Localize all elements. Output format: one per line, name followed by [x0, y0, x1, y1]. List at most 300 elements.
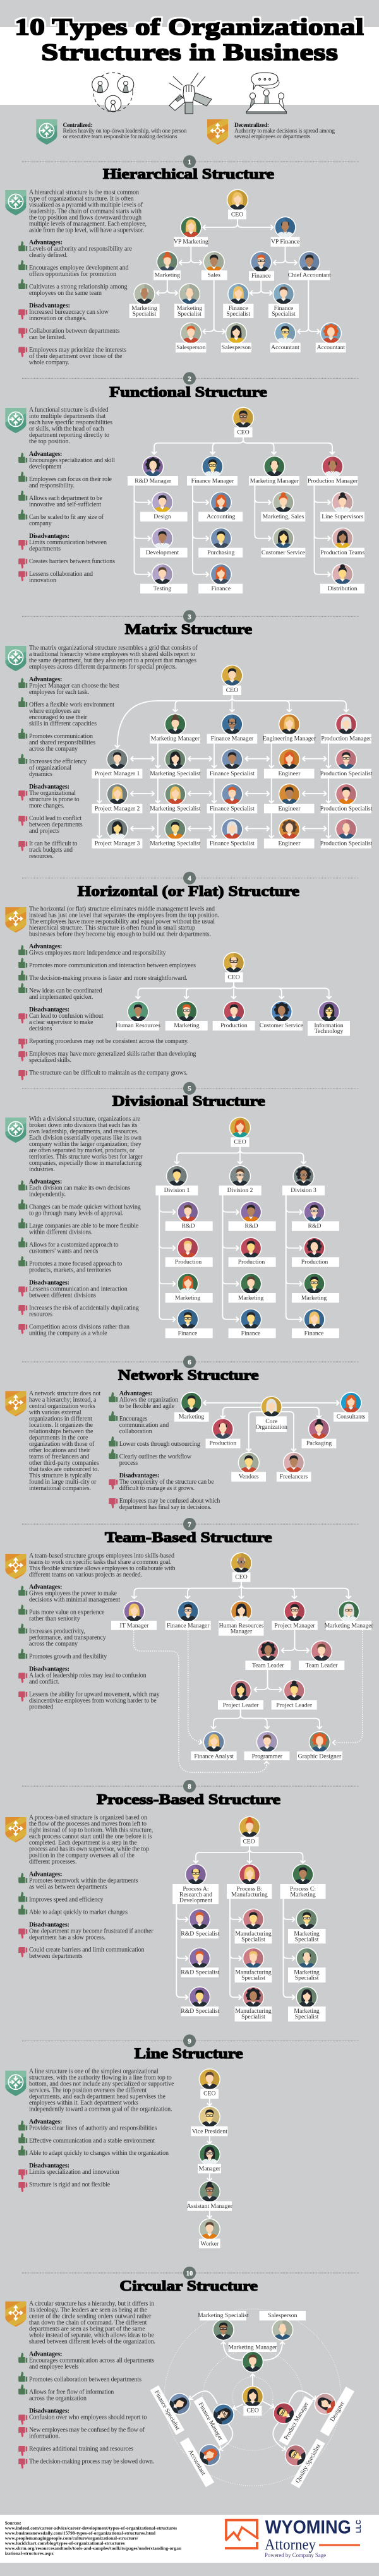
disadvantages: more changes.: [29, 802, 64, 809]
node: Marketing Manager: Marketing Manager: [325, 1623, 374, 1630]
advantages: performance, and transparency: [29, 1634, 106, 1642]
disadvantages: Collaboration between departments: [29, 328, 120, 335]
node: Accountant: [316, 322, 346, 352]
node: Customer Service: [261, 528, 305, 558]
node: Testing: [140, 563, 188, 593]
node: Finance Specialist: Specialist: [226, 311, 250, 318]
disadvantages: between departments: [29, 1953, 83, 1960]
heading: circular: Circular Structure: [119, 2278, 258, 2294]
node: Manufacturing Specialist: Specialist: [241, 2013, 265, 2020]
node: Marketing Manager: [228, 2342, 277, 2373]
node: VP Marketing: [174, 217, 208, 247]
node: Finance Specialist: Finance Specialist: [210, 805, 255, 812]
description: each have specific responsibilities: [29, 419, 112, 426]
legend: decentralized: several employees or departments: [234, 134, 310, 140]
disadvantages: A lack of leadership roles may lead to confusion: [29, 1672, 147, 1679]
node: Process C: Marketing: Marketing: [290, 1891, 316, 1898]
disadvantages: Lessens communication and interaction: [29, 1285, 128, 1293]
disadvantages: departments: [29, 546, 61, 552]
sources: www.indeed.com/career-advice/career-development/types-of-organizational-structures: [5, 2525, 177, 2531]
section 5: divisional structure: [5, 1082, 359, 1338]
description: visualized as a pyramid with multiple levels of: [29, 202, 143, 208]
node: Marketing Specialist: [288, 1986, 326, 2022]
disadvantages: [18, 533, 115, 584]
node: Finance Specialist: Specialist: [272, 311, 296, 318]
node: R&D Specialist: [181, 1909, 220, 1938]
node: Production Specialist: Production Specialist: [320, 840, 373, 847]
org chart: hierarchical: [129, 189, 346, 352]
node: Division 3: Division 3: [291, 1187, 316, 1194]
badge 6: 6: [188, 1359, 191, 1366]
description: departments in the core: [29, 1434, 88, 1441]
description: other third-party companies: [29, 1460, 99, 1467]
disadvantages: disincentivize employees from working harder to be: [29, 1697, 157, 1705]
node: Project Manager 3: Project Manager 3: [95, 840, 140, 847]
heading: horizontal: Horizontal (or Flat) Structure: [78, 883, 299, 899]
node: Finance: Finance: [211, 585, 231, 592]
description: broken down into divisions that each has its: [29, 1122, 137, 1129]
node: Marketing: Marketing: [301, 1294, 327, 1301]
node: Vendors: Vendors: [239, 1473, 259, 1480]
disadvantages: Structure is rigid and not flexible: [29, 2181, 111, 2188]
node: CEO: [229, 1117, 251, 1147]
logo: WYOMING: [265, 2517, 351, 2538]
advantages: Lower costs through outsourcing: [119, 1441, 200, 1448]
node: Marketing Specialist: Marketing: [131, 305, 157, 312]
advantages: across the organization: [29, 2395, 87, 2402]
node: Finance: [198, 563, 243, 593]
advantages: Encourages: [119, 1416, 148, 1422]
node: Finance Manager: Finance Manager: [167, 1623, 210, 1630]
logo: [225, 2517, 363, 2559]
node: Marketing: Marketing: [174, 1022, 200, 1029]
disadvantages: Employees may have more generalized skills rather than developing: [29, 1051, 196, 1058]
description: The horizontal (or flat) structure eliminates middle management levels and: [29, 905, 215, 913]
description: [29, 2301, 155, 2345]
description: [29, 2068, 174, 2113]
node: Production: Production: [220, 1022, 248, 1029]
node: Marketing Specialist: [288, 1909, 326, 1943]
node: Marketing Specialist: Specialist: [295, 1975, 319, 1982]
connector arrows: [209, 2099, 210, 2218]
description: different teams on various projects as needed.: [29, 1571, 142, 1578]
description: different processes.: [29, 1859, 76, 1865]
advantages: Gives employees more independence and responsibility: [29, 950, 166, 957]
node: Marketing Specialist: [198, 2311, 249, 2340]
section 1: hierarchical structure: [5, 155, 359, 366]
description: departments, and each department head supervises the: [29, 2094, 165, 2100]
node: Finance Analyst: Finance Analyst: [194, 1753, 234, 1760]
node: Process A: Research and Development: Research and: [179, 1891, 212, 1898]
node: CEO: [239, 1816, 260, 1846]
node: Production: [206, 1418, 240, 1448]
node: Programmer: [244, 1731, 289, 1760]
disadvantages: Lessens collaboration and: [29, 571, 93, 578]
sources: www.shrm.org/resourcesandtools/tools-and-samples/toolkits/pages/understanding-organ: [5, 2546, 181, 2551]
advantages: of organizational: [29, 765, 71, 772]
description: multiple levels of management. Each employee,: [29, 221, 147, 227]
advantages: to be flexible and agile: [119, 1403, 175, 1410]
description: have a hierarchy; instead, a: [29, 1397, 97, 1404]
node: Production Manager: [307, 456, 358, 486]
advantages: company: [29, 520, 52, 527]
advantages: Promotes communication: [29, 733, 93, 740]
node: R&D: [229, 1201, 276, 1231]
disadvantages: Limits communication between: [29, 539, 107, 546]
advantages: Advantages:: [29, 2351, 62, 2358]
advantages: Allows for a customized approach to: [29, 1241, 119, 1249]
description: instead has just one level that separates the employees from the top position.: [29, 912, 219, 919]
disadvantages: Lessens the ability for upward movement, which may: [29, 1691, 160, 1698]
node: Process C: Marketing: [280, 1864, 326, 1899]
node: R&D: [165, 1201, 213, 1231]
node: Production Teams: Production Teams: [320, 549, 364, 556]
org chart: functional: [128, 407, 364, 593]
node: Human Resources Manager: Human Resources: [219, 1623, 264, 1630]
node: Marketing: Marketing: [155, 272, 180, 279]
node: Purchasing: Purchasing: [207, 549, 234, 556]
disadvantages: between departments: [29, 821, 83, 828]
node: IT Manager: IT Manager: [119, 1623, 149, 1630]
description: shared between different levels of the organization.: [29, 2339, 155, 2345]
node: CEO: CEO: [227, 974, 240, 981]
node: Finance Specialist: [207, 784, 257, 813]
section 9: line structure: [5, 2034, 359, 2248]
advantages: where employees are: [29, 708, 81, 715]
advantages: Encourages communication across all departments: [29, 2358, 154, 2364]
advantages: decisions with minimal management: [29, 1596, 121, 1604]
concentric rings: [164, 2309, 341, 2486]
icon: decentralized shield: [5, 1388, 26, 1420]
disadvantages: [18, 1922, 153, 1960]
node: R&D Specialist: R&D Specialist: [181, 1969, 220, 1976]
advantages: Large companies are able to be more flexible: [29, 1222, 139, 1230]
disadvantages: It can be difficult to: [29, 840, 77, 847]
node: Salesperson: Salesperson: [268, 2312, 298, 2319]
connector arrows: [159, 1147, 304, 1320]
advantages: as well as between departments: [29, 1884, 107, 1890]
icon: centralized shield: [5, 408, 26, 433]
node: Product Manager: Product Manager: [283, 2400, 310, 2441]
advantages: Changes can be made quicker without having: [29, 1203, 141, 1211]
node: Marketing, Sales: Marketing, Sales: [263, 513, 304, 520]
node: R&D Specialist: R&D Specialist: [181, 1931, 220, 1938]
section 8: process-based structure: [5, 1780, 359, 2022]
advantages: process: [119, 1460, 138, 1467]
node: Project Manager 2: Project Manager 2: [95, 805, 140, 812]
advantages: development: [29, 463, 61, 470]
description: independently toward a common goal of the organization.: [29, 2106, 172, 2113]
description: that tasks are outsourced to.: [29, 1466, 99, 1473]
logo: Attorney: [265, 2537, 316, 2553]
description: bottom, and does not include any specialized or supportive: [29, 2081, 174, 2087]
org chart: matrix: [92, 665, 373, 849]
node: Process C: Marketing: Process C:: [290, 1885, 316, 1892]
badge 8: [22, 1780, 359, 1792]
advantages: Gives employees the power to make: [29, 1590, 117, 1597]
sources: [5, 2520, 181, 2556]
disadvantages: Employees may prioritize the interests: [29, 347, 126, 354]
node: CEO: [227, 189, 248, 219]
node: Marketing: [165, 1001, 208, 1030]
disadvantages: uniting the company as a whole: [29, 1330, 107, 1337]
advantages: [18, 2119, 169, 2157]
description: [29, 1815, 153, 1865]
section 2: functional structure: [5, 372, 364, 593]
node: Engineer: Engineer: [279, 770, 301, 777]
description: position in the company oversees all of the: [29, 1852, 135, 1859]
advantages: and responsibility.: [29, 482, 75, 489]
disadvantages: Limits specialization and innovation: [29, 2169, 119, 2176]
node: Marketing Specialist: Marketing Specialist: [150, 805, 201, 812]
description: territories. This structure works best for larger: [29, 1154, 143, 1160]
description: The employees have more responsibility and equal power without the usual: [29, 918, 215, 926]
node: Finance: [229, 1308, 276, 1338]
heading: functional: Functional Structure: [109, 384, 267, 400]
description: center of the circle sending orders outward rather: [29, 2313, 152, 2320]
node: Marketing Specialist: Marketing: [294, 2008, 320, 2015]
node: Team Leader: Team Leader: [306, 1662, 338, 1669]
node: Marketing: [292, 1273, 339, 1303]
advantages: Allows each department to be: [29, 495, 103, 502]
description: the same department, but they also report to a project that manages: [29, 657, 196, 664]
node: Customer Service: [260, 1001, 303, 1030]
description: or skills, with the head of each: [29, 426, 104, 432]
description: A process-based structure is organized based on: [29, 1815, 147, 1821]
heading: line: Line Structure: [135, 2046, 243, 2061]
node: Engineer: [264, 749, 315, 778]
heading: hierarchical: Hierarchical Structure: [103, 166, 274, 182]
node: Marketing Specialist: Marketing Specialist: [198, 2312, 249, 2319]
advantages: [18, 1178, 141, 1274]
node: IT Manager: [111, 1601, 157, 1630]
node: Production: [213, 1001, 255, 1030]
node: Manager: [198, 2144, 221, 2173]
node: Process A: Research and Development: [172, 1864, 219, 1904]
badge 9: 9: [188, 2037, 191, 2045]
node: Project Manager 3: [92, 818, 142, 849]
node: CEO: CEO: [203, 2090, 215, 2097]
advantages: New ideas can be coordinated: [29, 987, 102, 994]
disadvantages: and conflict.: [29, 1678, 59, 1686]
disadvantages: difficult to manage as it grows.: [119, 1485, 195, 1492]
node: Division 3: [282, 1166, 325, 1195]
node: Production Manager: Production Manager: [308, 477, 358, 485]
node: Marketing Manager: Marketing Manager: [228, 2344, 277, 2351]
disadvantages: department has a slow process.: [29, 1935, 105, 1941]
node: Marketing: [174, 1392, 209, 1422]
connector arrows: [134, 438, 332, 575]
node: Designer: [310, 2387, 354, 2436]
description: right instead of top to bottom. With this structure,: [29, 1827, 153, 1834]
badge 7: [22, 1518, 359, 1530]
connector arrows: [190, 2342, 315, 2450]
node: Manufacturing Specialist: Specialist: [241, 1936, 265, 1943]
node: Project Manager 1: [92, 749, 142, 778]
node: Production: Production: [238, 1258, 265, 1265]
legend: centralized: or executive team responsible for making decisions: [63, 133, 177, 140]
heading: network: Network Structure: [118, 1367, 259, 1383]
advantages: Promotes more communication and interaction between employees: [29, 962, 196, 969]
disadvantages: The decision-making process may be slowed down.: [29, 2459, 154, 2465]
disadvantages: Reporting procedures may not be consistent across the company.: [29, 1038, 189, 1045]
description: organization with those of: [29, 1441, 95, 1448]
description: [29, 1390, 101, 1492]
node: Worker: [199, 2219, 220, 2248]
disadvantages: a clear supervisor to make: [29, 1019, 93, 1026]
node: Finance Specialist: [207, 818, 257, 849]
node: Information Technology: Technology: [315, 1028, 343, 1035]
disadvantages: Disadvantages:: [29, 1666, 69, 1673]
node: Engineer: [264, 818, 315, 849]
disadvantages: Confusion over who employees should report to: [29, 2414, 147, 2421]
advantages: [18, 943, 196, 1001]
advantages: Offers a flexible work environment: [29, 701, 114, 708]
node: Design: [140, 491, 188, 522]
node: Human Resources Manager: Manager: [231, 1628, 253, 1635]
disadvantages: Requires additional training and resources: [29, 2446, 133, 2452]
node: Production: [292, 1237, 339, 1267]
node: Production Manager: Production Manager: [321, 736, 371, 742]
advantages: across the company: [29, 746, 78, 753]
connector arrows: [99, 695, 346, 838]
description: with various external: [29, 1409, 81, 1416]
disadvantages: structure is prone to: [29, 796, 80, 803]
node: Finance Analyst: [191, 1731, 237, 1760]
advantages: [18, 676, 119, 778]
disadvantages: Disadvantages:: [29, 302, 70, 309]
badge 5: [22, 1082, 359, 1095]
node: Project Leader: Project Leader: [223, 1702, 259, 1708]
node: Sales: Sales: [207, 272, 220, 279]
description: industries.: [29, 1166, 55, 1173]
legend: centralized: [36, 119, 187, 145]
node: Team Leader: [245, 1640, 291, 1670]
description: companies, especially those in manufacturing: [29, 1160, 141, 1167]
description: A hierarchical structure is the most common: [29, 189, 139, 196]
node: Engineer: Engineer: [279, 805, 301, 812]
advantages: encouraged to use their: [29, 714, 88, 721]
advantages: Project Manager can choose the best: [29, 683, 119, 689]
node: Team Leader: [299, 1640, 344, 1670]
node: Production Specialist: Production Specialist: [320, 770, 373, 777]
description: department reporting directly to: [29, 432, 109, 439]
description: departments are seen as being part of the same: [29, 2326, 145, 2332]
node: Marketing Specialist: Marketing Specialist: [150, 770, 201, 777]
node: Marketing Specialist: Specialist: [295, 2013, 319, 2020]
node: Purchasing: [198, 528, 243, 558]
description: company within the larger organization; they: [29, 1141, 141, 1148]
icon: centralized shield: [5, 190, 26, 215]
node: Accounting: [198, 491, 243, 522]
node: Marketing Specialist: Marketing Specialist: [150, 840, 201, 847]
node: Quality Specialist: Quality Specialist: [294, 2443, 322, 2484]
section 10: circular structure: [5, 2267, 359, 2488]
node: Project Manager 1: Project Manager 1: [95, 770, 140, 777]
advantages: skills in different capacities: [29, 720, 97, 727]
disadvantages: Increased bureaucracy can slow: [29, 309, 109, 316]
disadvantages: promoted: [29, 1703, 53, 1711]
badge 4: 4: [188, 875, 191, 883]
advantages: Able to adapt quickly to changes within the organization: [29, 2150, 169, 2157]
description: employees within it. Each department works: [29, 2100, 138, 2106]
legend: decentralized: [207, 117, 335, 148]
description: process and has its own supervisor, while the top: [29, 1846, 149, 1852]
advantages: Advantages:: [29, 1871, 62, 1878]
node: Accountant: Accountant: [317, 344, 346, 351]
node: CEO: CEO: [231, 211, 243, 218]
node: Manufacturing Specialist: [235, 1947, 272, 1983]
advantages: clearly defined.: [29, 252, 68, 259]
description: A network structure does not: [29, 1390, 101, 1397]
advantages: The decision-making process is faster and more straightforward.: [29, 975, 188, 982]
node: Finance Specialist: [223, 283, 253, 318]
description: found in large multi-city or: [29, 1479, 97, 1486]
advantages: [18, 1583, 121, 1661]
node: Finance: Finance: [178, 1330, 197, 1337]
node: Finance Manager: [187, 456, 238, 486]
node: Manufacturing Specialist: Manufacturing: [235, 1931, 272, 1938]
node: Manager: Manager: [199, 2166, 221, 2173]
node: Finance Manager: Finance Manager: [191, 477, 234, 485]
advantages: customers' wants and needs: [29, 1248, 98, 1255]
logo: Powered by Company Sage: [265, 2553, 326, 2559]
disadvantages: [109, 1472, 220, 1511]
node: Finance Specialist: Finance Specialist: [210, 770, 255, 777]
section 7: team-based structure: [5, 1518, 374, 1772]
badge 3: 3: [188, 613, 191, 621]
disadvantages: Could create barriers and limit communication: [29, 1947, 144, 1953]
node: Finance Specialist: Finance Specialist: [210, 840, 255, 847]
advantages: Increases productivity,: [29, 1628, 85, 1635]
disadvantages: Disadvantages:: [29, 1006, 69, 1013]
description: [29, 905, 219, 938]
node: Marketing: Marketing: [179, 1413, 204, 1420]
node: Finance Specialist: [150, 2385, 195, 2435]
org chart: divisional: [155, 1117, 339, 1338]
node: Finance: [292, 1308, 339, 1338]
disadvantages: Disadvantages:: [29, 1279, 69, 1287]
advantages: Promotes teamwork within the departments: [29, 1878, 138, 1884]
advantages: Advantages:: [29, 676, 62, 683]
node: Project Leader: [272, 1679, 317, 1710]
node: Production: [229, 1237, 276, 1267]
description: a traditional hierarchy where employees with shared skills report to: [29, 651, 195, 658]
advantages: Allows for free flow of information: [29, 2389, 114, 2395]
legend: decentralized: Decentralized:: [234, 122, 269, 129]
sources: www.lucidchart.com/blog/types-of-organizational-structures: [5, 2541, 125, 2546]
node: Production: [165, 1237, 213, 1267]
advantages: Advantages:: [29, 239, 63, 246]
node: CEO: CEO: [226, 687, 238, 694]
icon: decentralized shield: [5, 905, 26, 936]
node: Vendors: [231, 1452, 266, 1482]
badge 2: [22, 372, 359, 385]
node: Process A: Research and Development: Development: [179, 1897, 212, 1904]
description: hierarchical structure. This structure is often found in small startup: [29, 924, 195, 932]
description: other locations and their: [29, 1447, 90, 1454]
advantages: Promotes a more focused approach to: [29, 1260, 122, 1268]
node: Production Specialist: [320, 818, 373, 849]
disadvantages: [18, 1279, 139, 1337]
node: Division 1: Division 1: [164, 1187, 190, 1194]
node: Production Specialist: Production Specialist: [320, 805, 373, 812]
advantages: Advantages:: [29, 451, 62, 458]
node: Marketing: [229, 1273, 276, 1303]
sources: Sources:: [5, 2520, 21, 2525]
node: Development: Development: [146, 549, 179, 556]
node: Assistant Manager: Assistant Manager: [187, 2203, 233, 2210]
